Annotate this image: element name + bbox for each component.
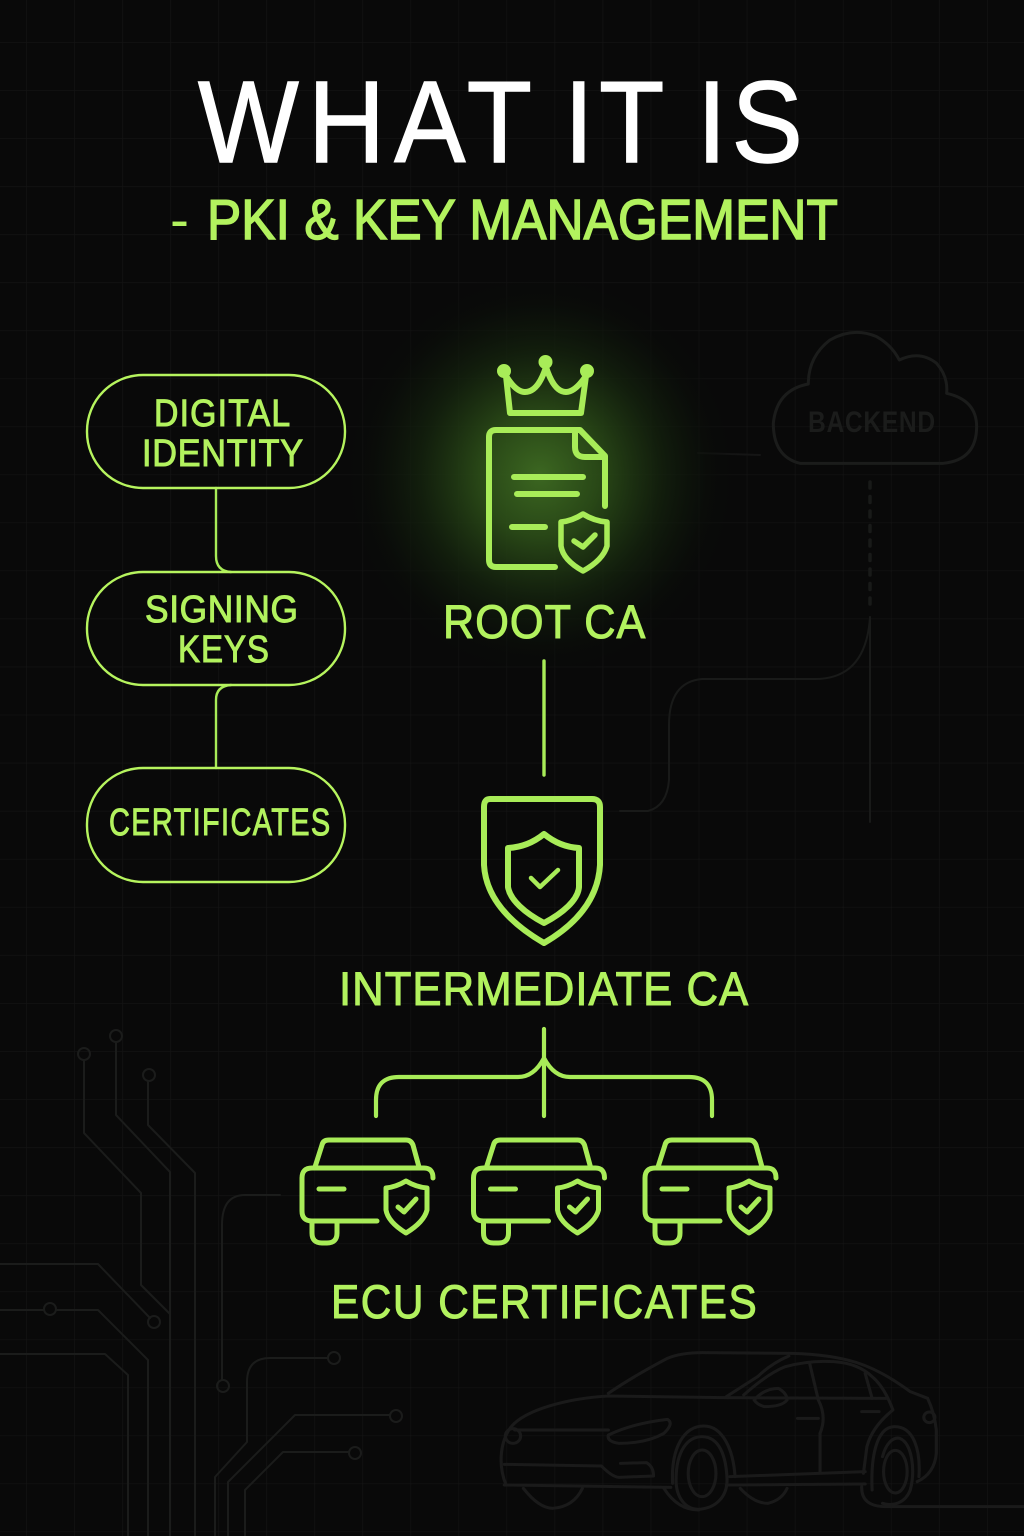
background: backend cloud: BACKEND bbox=[808, 405, 935, 439]
subtitle: - bbox=[170, 188, 189, 252]
icon: car 2 bbox=[474, 1140, 604, 1243]
background: car outline bbox=[501, 1353, 1024, 1510]
pill: digital identity bbox=[87, 375, 345, 488]
icon: intermediate CA shield bbox=[484, 799, 600, 943]
connector: root to intermediate bbox=[542, 661, 546, 775]
title: IT bbox=[564, 57, 664, 187]
background: backend connector lines bbox=[620, 453, 870, 822]
icon: document bbox=[489, 430, 605, 567]
connector: branches to ECUs bbox=[376, 1029, 712, 1116]
pill: digital identity: DIGITAL bbox=[154, 391, 290, 434]
glow behind root CA bbox=[340, 270, 740, 680]
pill connectors bbox=[216, 488, 231, 768]
icon: crown bbox=[500, 358, 591, 413]
icon: root CA crown and certificate bbox=[489, 358, 607, 571]
subtitle: PKI & KEY MANAGEMENT bbox=[207, 189, 838, 252]
pill: signing keys: KEYS bbox=[178, 628, 269, 671]
pill: signing keys bbox=[87, 572, 345, 685]
label: root CA: ROOT CA bbox=[443, 595, 646, 648]
title bbox=[198, 57, 803, 187]
icons: ECU cars bbox=[302, 1140, 776, 1243]
title: WHAT bbox=[198, 57, 532, 187]
background: backend cloud bbox=[773, 332, 977, 463]
icon: car 1 bbox=[302, 1140, 433, 1243]
pill: certificates: CERTIFICATES bbox=[109, 801, 330, 844]
pill: certificates bbox=[87, 768, 345, 882]
label: ECU certificates: ECU CERTIFICATES bbox=[331, 1277, 757, 1329]
icon: small shield bbox=[561, 514, 607, 571]
panel: concept pills bbox=[87, 375, 345, 882]
pill: digital identity: IDENTITY bbox=[142, 431, 303, 474]
label: intermediate CA: INTERMEDIATE CA bbox=[339, 963, 749, 1015]
title: IS bbox=[697, 57, 803, 187]
background: circuit traces bbox=[0, 1030, 402, 1536]
pill: signing keys: SIGNING bbox=[145, 588, 298, 630]
icon: car 3 bbox=[645, 1140, 776, 1243]
